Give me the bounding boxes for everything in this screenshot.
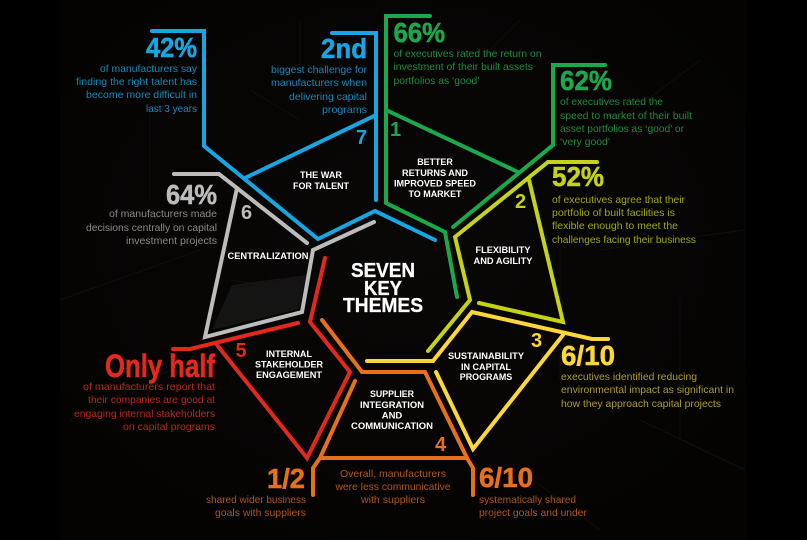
text: 52 percent description: portfolio of built facilities is bbox=[552, 208, 675, 219]
number 2: 2 bbox=[515, 191, 526, 213]
orange outline bbox=[313, 320, 473, 495]
theme 7: the war for talent bbox=[76, 31, 435, 240]
label: sustainability: PROGRAMS bbox=[460, 372, 513, 383]
statistic: 1/2: 1/2 bbox=[267, 463, 305, 494]
text: 42 percent description: become more difficult in bbox=[86, 90, 197, 101]
text: 42 percent description: finding the right talent has bbox=[76, 77, 197, 88]
text: 62 percent description: ‘very good’ bbox=[560, 137, 610, 148]
text: 62 percent description bbox=[560, 97, 692, 148]
text: only half description: on capital programs bbox=[123, 422, 215, 433]
label: sustainability bbox=[448, 351, 525, 383]
label: flexibility and agility: AND AGILITY bbox=[474, 256, 533, 267]
theme 5: internal stakeholder engagement bbox=[74, 258, 350, 458]
text: 62 percent description: asset portfolios as ‘good’ or bbox=[560, 124, 685, 135]
text: 64 percent description bbox=[86, 209, 217, 247]
label: better returns: TO MARKET bbox=[408, 189, 462, 200]
text: 62 percent description: of executives rated the bbox=[560, 97, 663, 108]
number 1: 1 bbox=[390, 119, 401, 141]
text: 66 percent description: portfolios as ‘good’ bbox=[394, 76, 480, 87]
text: 6/10 description: executives identified reducing bbox=[561, 372, 697, 383]
theme 4: supplier integration bbox=[206, 320, 588, 519]
label: supplier integration: COMMUNICATION bbox=[351, 421, 433, 432]
theme 1: better returns bbox=[386, 16, 692, 297]
label: better returns: RETURNS AND bbox=[402, 168, 468, 179]
text: 62 percent description: speed to market of their built bbox=[560, 111, 692, 122]
text: only half description: engaging internal stakeholders bbox=[74, 409, 215, 420]
statistic: 6/10: 6/10 bbox=[561, 340, 615, 371]
text: 6/10 description: how they approach capital projects bbox=[561, 399, 721, 410]
red outline bbox=[173, 258, 350, 458]
label: better returns bbox=[394, 157, 476, 200]
text: 2nd description bbox=[271, 65, 368, 116]
statistic: 62 percent: 62% bbox=[560, 65, 612, 96]
text: 2nd description: programs bbox=[322, 105, 367, 116]
yellow outline bbox=[367, 312, 608, 449]
text: 1/2 description bbox=[206, 495, 306, 519]
statistic: 64 percent: 64% bbox=[166, 179, 217, 210]
text: 2nd description: biggest challenge for bbox=[271, 65, 368, 76]
text: 42 percent description: last 3 years bbox=[146, 104, 197, 115]
green outline: 62 percent branch bbox=[453, 65, 605, 227]
blue outline: 42 percent branch bbox=[152, 31, 435, 240]
text: only half description: of manufacturers report that bbox=[83, 382, 215, 393]
number 3: 3 bbox=[531, 330, 542, 352]
statistic: only half: Only half bbox=[105, 348, 215, 384]
text: overall description: were less communicative bbox=[335, 482, 451, 493]
label: better returns: IMPROVED SPEED bbox=[394, 178, 476, 190]
theme 6: centralization bbox=[86, 174, 374, 337]
label: sustainability: IN CAPITAL bbox=[461, 362, 511, 373]
label: flexibility and agility: FLEXIBILITY bbox=[476, 245, 531, 256]
text: overall description: Overall, manufacturers bbox=[340, 469, 446, 480]
text: 6/10 description: project goals and under bbox=[479, 508, 588, 519]
text: 52 percent description bbox=[552, 195, 696, 246]
number 6: 6 bbox=[241, 202, 252, 224]
theme 3: sustainability bbox=[367, 312, 734, 449]
label: the war for talent: THE WAR bbox=[300, 170, 342, 181]
yellow-green outline bbox=[428, 162, 597, 351]
statistic: 52 percent: 52% bbox=[552, 161, 604, 192]
label: supplier integration bbox=[351, 389, 433, 432]
statistic: 66 percent: 66% bbox=[394, 17, 445, 48]
title: seven key themes: THEMES bbox=[343, 295, 423, 317]
green outline: 66 percent branch bbox=[386, 16, 518, 297]
text: 52 percent description: of executives agree that their bbox=[552, 195, 686, 206]
text: overall description: with suppliers bbox=[360, 495, 425, 506]
text: only half description: their companies are good at bbox=[88, 395, 215, 406]
text: 2nd description: manufacturers when bbox=[271, 78, 367, 89]
number 5: 5 bbox=[236, 340, 247, 362]
label: supplier integration: SUPPLIER bbox=[370, 389, 414, 400]
text: 6/10 description bbox=[479, 495, 588, 519]
label: sustainability: SUSTAINABILITY bbox=[448, 351, 525, 362]
label: centralization: CENTRALIZATION bbox=[228, 251, 309, 262]
label: supplier integration: INTEGRATION bbox=[360, 400, 424, 411]
label: the war for talent: FOR TALENT bbox=[293, 181, 349, 192]
label: the war for talent bbox=[293, 170, 349, 192]
text: 42 percent description: of manufacturers say bbox=[100, 64, 198, 75]
label: supplier integration: AND bbox=[382, 410, 402, 422]
grey outline bbox=[174, 174, 374, 337]
text: 64 percent description: of manufacturers made bbox=[109, 209, 217, 220]
text: 64 percent description: decisions centrally on capital bbox=[86, 223, 217, 234]
text: 6/10 description: systematically shared bbox=[479, 495, 576, 506]
statistic: 42 percent: 42% bbox=[146, 32, 197, 63]
text: only half description bbox=[74, 382, 215, 433]
title: seven key themes: SEVEN bbox=[351, 260, 415, 282]
text: 66 percent description: investment of their built assets bbox=[394, 62, 533, 73]
label: internal stakeholder engagement: INTERNAL bbox=[266, 349, 312, 360]
label: better returns: BETTER bbox=[417, 157, 453, 168]
text: 1/2 description: shared wider business bbox=[206, 495, 306, 506]
text: 52 percent description: flexible enough to meet the bbox=[552, 221, 678, 232]
text: 6/10 description bbox=[561, 372, 734, 410]
title: seven key themes bbox=[343, 260, 423, 317]
text: 64 percent description: investment projects bbox=[126, 236, 217, 247]
text: 42 percent description bbox=[76, 64, 198, 115]
text: overall description bbox=[335, 469, 451, 506]
text: 66 percent description: of executives rated the return on bbox=[394, 49, 542, 60]
label: internal stakeholder engagement bbox=[255, 349, 323, 381]
number 4: 4 bbox=[435, 434, 447, 456]
blue outline: 2nd branch bbox=[245, 33, 376, 200]
statistic: 2nd: 2nd bbox=[321, 33, 367, 64]
title: seven key themes: KEY bbox=[364, 278, 403, 300]
text: 2nd description: delivering capital bbox=[289, 92, 367, 103]
label: internal stakeholder engagement: STAKEHOLDER bbox=[255, 360, 323, 370]
text: 66 percent description bbox=[394, 49, 542, 87]
number 7: 7 bbox=[356, 127, 367, 149]
text: 6/10 description: environmental impact as significant in bbox=[561, 385, 734, 396]
text: 52 percent description: challenges facing their business bbox=[552, 235, 696, 246]
label: internal stakeholder engagement: ENGAGEMENT bbox=[256, 370, 322, 381]
theme 2: flexibility and agility bbox=[428, 161, 696, 351]
text: 1/2 description: goals with suppliers bbox=[215, 508, 306, 519]
label: flexibility and agility bbox=[474, 245, 533, 267]
statistic: 6/10: 6/10 bbox=[479, 462, 533, 493]
